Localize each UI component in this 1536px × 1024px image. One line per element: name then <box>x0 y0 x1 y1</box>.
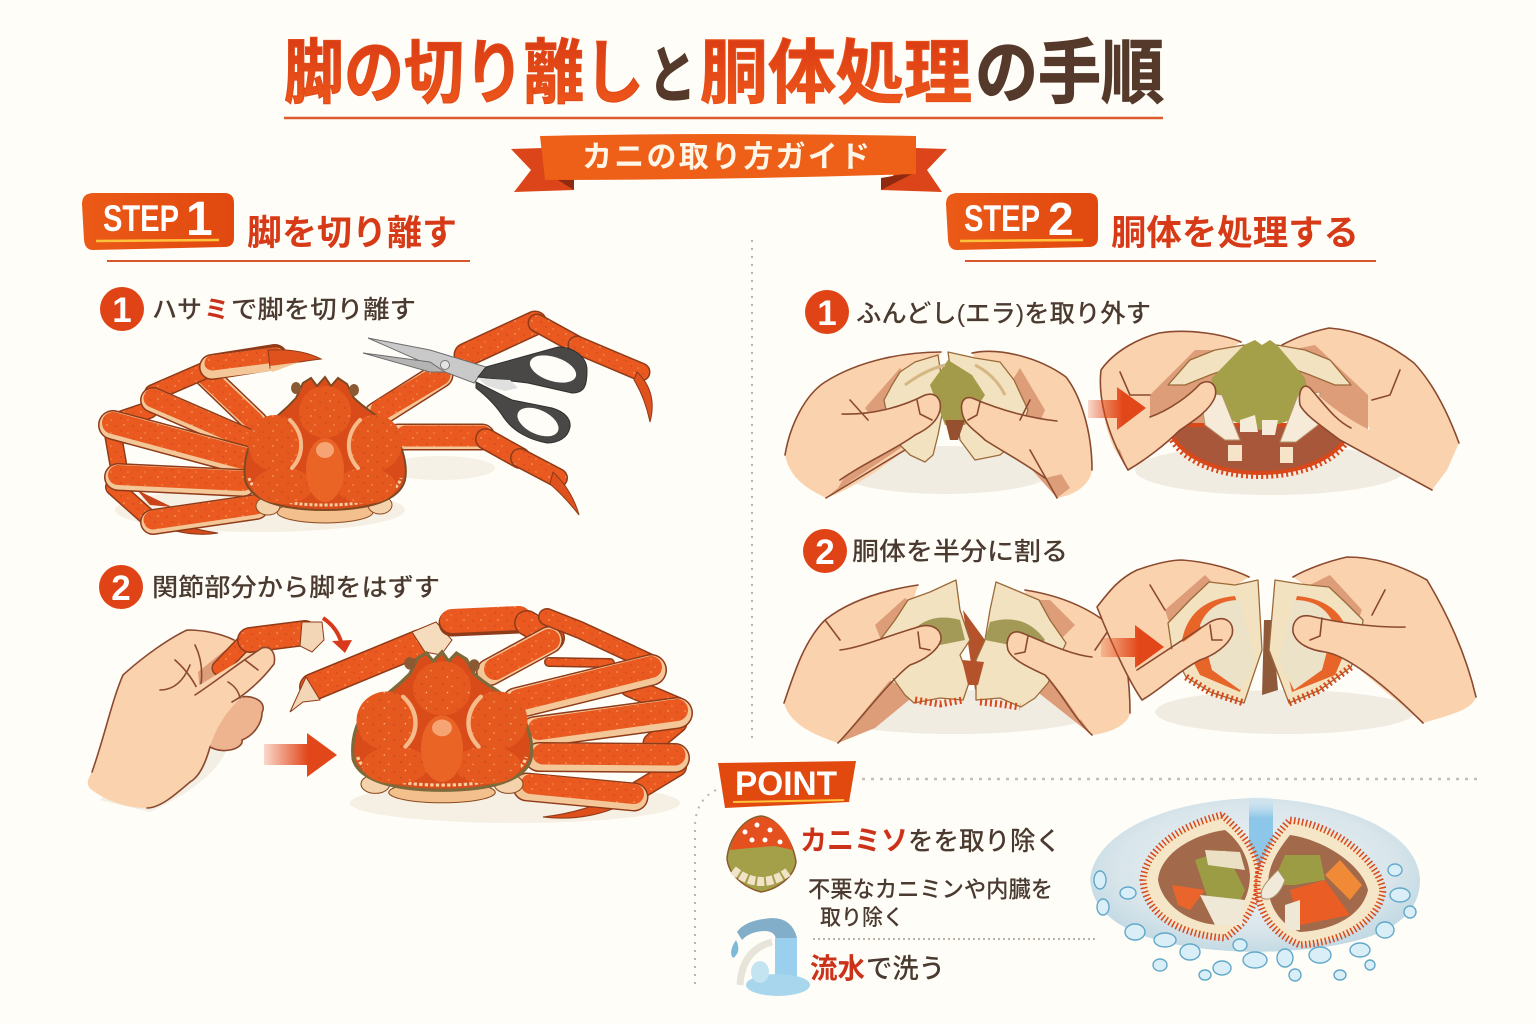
held leg segment <box>220 622 324 668</box>
title: と <box>648 42 696 111</box>
thumbs <box>810 626 941 722</box>
hands opening crab, before <box>785 351 1092 498</box>
arrow <box>1088 387 1146 430</box>
right hand <box>1282 328 1459 490</box>
thumbs <box>1115 618 1233 700</box>
step 1-1 label: ミ <box>204 296 229 324</box>
point box frame <box>695 779 1480 985</box>
point note text <box>808 876 1053 930</box>
left half of shell <box>1143 815 1259 938</box>
point text: wash: で洗う <box>866 954 945 984</box>
left hand <box>1097 560 1249 700</box>
left hand back <box>785 352 941 498</box>
right hand <box>1293 557 1476 723</box>
icon: scissors <box>363 338 587 443</box>
step 2-1 label <box>805 290 1151 334</box>
split shell halves <box>880 580 1066 707</box>
title: の手順 <box>975 34 1164 112</box>
step 1-1 label: 1 <box>112 291 132 330</box>
thumb <box>172 647 274 725</box>
droplets <box>1094 864 1416 981</box>
step 2-1 label: ふんどし(エラ)を取り外す <box>856 300 1151 328</box>
washing crab illustration <box>1090 797 1420 981</box>
hands opening crab, after <box>1100 328 1459 495</box>
step 2-2 label: 2 <box>815 533 835 572</box>
point text: wash <box>810 953 945 984</box>
hand back fingers <box>210 697 263 751</box>
left hand <box>784 585 918 743</box>
step 1-2 label: 関節部分から脚をはずす <box>152 574 440 602</box>
arrow <box>264 733 337 777</box>
step 2-2 label <box>803 529 1068 573</box>
crab with scissors illustration <box>111 323 652 534</box>
point text: wash: 流水 <box>810 953 865 984</box>
point text: remove crab innards: をを取り除く <box>908 826 1061 856</box>
curved arrow <box>323 618 352 653</box>
point note text: 取り除く <box>820 905 904 930</box>
thumbs <box>1112 382 1216 470</box>
thumbs <box>805 394 940 480</box>
opened shell <box>1168 340 1351 476</box>
right legs of crab 1 <box>377 323 652 515</box>
left legs of crab 1 <box>111 350 321 534</box>
hands splitting body, after <box>1097 557 1476 734</box>
step 2 badge: STEP <box>964 198 1040 239</box>
step 1 badge: 1 <box>186 193 213 246</box>
step 2 badge <box>946 193 1098 250</box>
right hand back <box>972 351 1092 498</box>
ribbon subtitle <box>511 134 947 192</box>
point text: remove crab innards <box>800 825 1061 856</box>
hand holding crab leg illustration <box>88 618 352 812</box>
step 1-1 label: で脚を切り離す <box>231 296 416 324</box>
title <box>284 34 1164 112</box>
hands splitting body, before <box>784 580 1130 743</box>
step 1 badge <box>82 193 234 250</box>
icon: crab meat egg <box>727 816 796 892</box>
step 1-2 label: 2 <box>111 569 131 608</box>
step 2-1 label: 1 <box>817 294 837 333</box>
carapace of crab 1 <box>245 377 406 523</box>
step 1 heading: 脚を切り離す <box>247 214 457 253</box>
point note text: 不栗なカニミンや内臓を <box>808 876 1053 902</box>
hand palm <box>88 630 275 808</box>
torn shell <box>884 352 1028 462</box>
point badge: POINT <box>735 765 837 803</box>
step 2 badge: 2 <box>1048 193 1074 245</box>
step 1-1 label <box>100 287 416 331</box>
step 2 heading: 胴体を処理する <box>1111 214 1359 253</box>
title: 胴体処理 <box>700 34 972 112</box>
step 2-2 label: 胴体を半分に割る <box>852 538 1068 566</box>
icon: faucet <box>731 918 810 996</box>
point badge <box>718 761 856 808</box>
carapace of crab 2 <box>353 652 532 803</box>
step 1-2 label <box>99 565 440 609</box>
point text: remove crab innards: カニミソ <box>800 825 908 856</box>
arrow <box>1101 625 1164 668</box>
water stream <box>1249 797 1273 867</box>
title: 脚の切り離し <box>284 34 644 112</box>
right hand <box>1025 590 1130 735</box>
legs of crab 2 <box>290 617 677 818</box>
crab with detached leg illustration <box>290 617 680 823</box>
split shell halves with orange rim <box>1168 580 1363 703</box>
step 1 badge: STEP <box>103 198 179 239</box>
left hand <box>1100 331 1241 470</box>
right half of shell <box>1257 820 1383 945</box>
step 1-1 label: ハサ <box>152 296 202 324</box>
ribbon subtitle: カニの取り方ガイド <box>582 141 870 174</box>
